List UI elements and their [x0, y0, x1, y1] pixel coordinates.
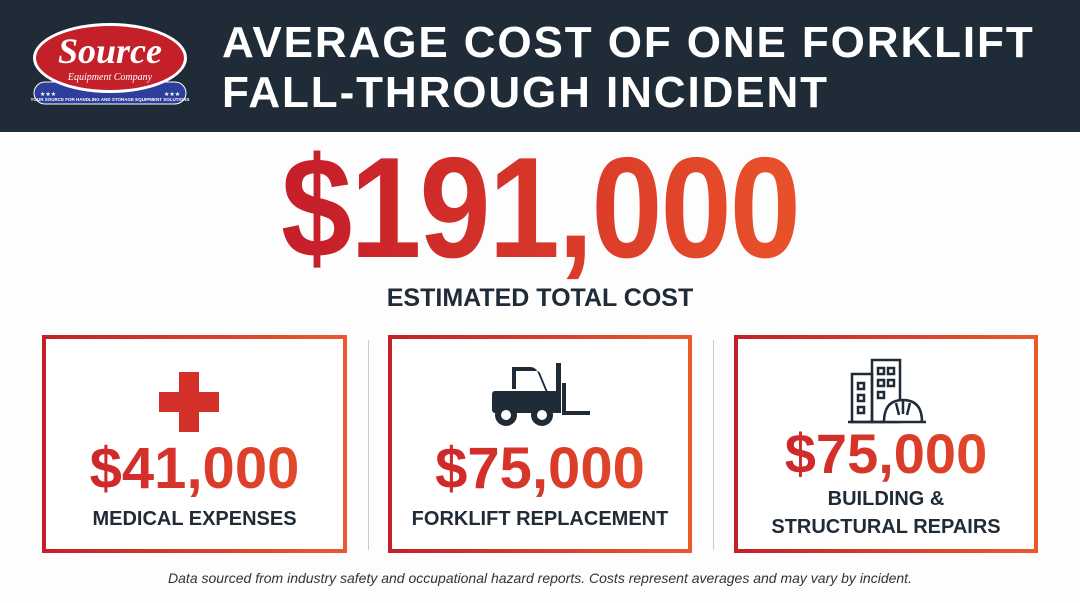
logo: YOUR SOURCE FOR HANDLING AND STORAGE EQUIPMENT SOLUTIONS: [30, 97, 190, 102]
title: AVERAGE COST OF ONE FORKLIFT: [222, 18, 1035, 67]
total cost: [0, 136, 1080, 282]
label: [771, 488, 1001, 538]
header bar: [0, 0, 1080, 132]
title: FALL-THROUGH INCIDENT: [222, 68, 829, 117]
logo: ★★★: [40, 91, 56, 98]
amount: [46, 435, 343, 502]
subtitle: ESTIMATED TOTAL COST: [387, 284, 693, 312]
logo: Source: [58, 31, 162, 71]
icon: buildings and hard hat: [848, 358, 926, 424]
label: FORKLIFT REPLACEMENT: [412, 508, 668, 530]
label: STRUCTURAL REPAIRS: [771, 516, 1001, 538]
logo: [30, 23, 190, 104]
amount: $41,000: [90, 436, 299, 501]
label: MEDICAL EXPENSES: [92, 508, 297, 530]
label: BUILDING &: [828, 488, 944, 510]
amount: [738, 421, 1034, 486]
amount: [392, 435, 688, 502]
icon: cross: [159, 372, 219, 432]
title: [222, 18, 1035, 117]
amount: $75,000: [435, 436, 645, 501]
total cost: $191,000: [281, 128, 799, 288]
footnote: Data sourced from industry safety and occupational hazard reports. Costs represent averages and may vary by incident.: [168, 570, 912, 586]
panel: medical: [42, 335, 347, 553]
logo: Equipment Company: [67, 72, 153, 83]
amount: $75,000: [785, 422, 987, 485]
icon: forklift: [492, 363, 590, 426]
logo: ★★★: [164, 91, 180, 98]
panel: building: [734, 335, 1038, 553]
panel: forklift: [388, 335, 692, 553]
